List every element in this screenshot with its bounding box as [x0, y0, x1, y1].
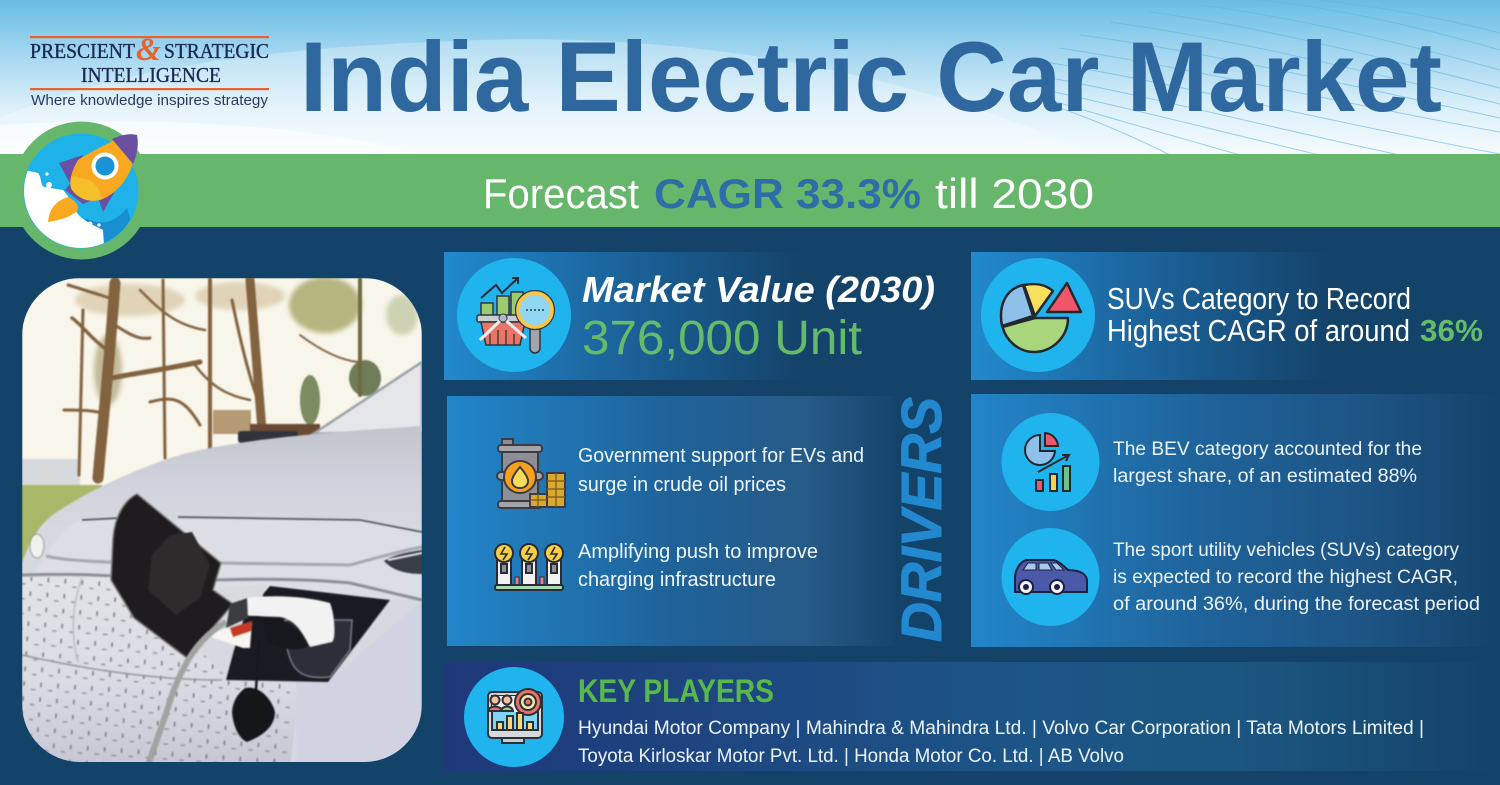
forecast CAGR value: CAGR 33.3%: [654, 170, 921, 217]
key players list line 1: Hyundai Motor Company | Mahindra & Mahindra Ltd. | Volvo Car Corporation | Tata Motors Limited |: [578, 718, 1424, 739]
charging cable: [148, 622, 226, 765]
hood crease and face: [22, 517, 422, 600]
logo: Prescient & Strategic Intelligence: Where knowledge inspires strategy: [31, 92, 268, 109]
charging socket: [226, 586, 390, 682]
forecast band: [0, 154, 1500, 227]
logo: Prescient & Strategic Intelligence: &: [136, 32, 161, 68]
plug cap: [231, 679, 276, 743]
market value figure: 376,000 Unit: [582, 312, 862, 365]
icon: market analysis: [457, 258, 571, 372]
driver text 2 continued: charging infrastructure: [578, 569, 776, 591]
charging port door: [111, 494, 233, 658]
panel: key players: [444, 662, 1500, 771]
driver text 2: Amplifying push to improve: [578, 541, 818, 563]
header sky background: [0, 0, 1500, 155]
photo: electric car charging: [22, 277, 422, 785]
SUVs line 2: Highest CAGR of around: [1107, 313, 1410, 348]
icon: pie chart: [981, 258, 1095, 372]
SUV text line 3: of around 36%, during the forecast period: [1113, 594, 1480, 615]
panel: segment insights: [971, 394, 1500, 647]
windshield: [313, 362, 422, 434]
logo: Prescient & Strategic Intelligence: PRESCIENT: [30, 39, 135, 63]
BEV text line 2: largest share, of an estimated 88%: [1113, 466, 1417, 487]
background sky and trees: [22, 278, 422, 563]
icon: charging stations: [495, 544, 563, 590]
title: India Electric Car Market: [300, 21, 1442, 132]
driver text 1: Government support for EVs and: [578, 445, 864, 467]
charging plug: [208, 596, 334, 649]
drivers vertical heading: DRIVERS: [890, 397, 954, 642]
car body: [22, 426, 422, 785]
icon: rocket badge: [23, 122, 140, 260]
key players heading: KEY PLAYERS: [578, 673, 774, 709]
SUV text line 1: The sport utility vehicles (SUVs) category: [1113, 540, 1459, 561]
icon: analytics monitor: [464, 667, 564, 767]
icon: oil barrel and coins: [497, 439, 565, 508]
market value heading: Market Value (2030): [582, 269, 935, 310]
key players list line 2: Toyota Kirloskar Motor Pvt. Ltd. | Honda Motor Co. Ltd. | AB Volvo: [578, 746, 1124, 767]
dotted grille: [22, 577, 422, 770]
logo: Prescient & Strategic Intelligence: INTELLIGENCE: [81, 63, 221, 87]
icon: pie and bar growth: [1002, 413, 1100, 511]
panel: SUVs highlight: [971, 252, 1500, 380]
forecast end year: till 2030: [935, 170, 1094, 217]
SUVs line 1: SUVs Category to Record: [1107, 281, 1411, 316]
BEV text line 1: The BEV category accounted for the: [1113, 439, 1422, 460]
icon: SUV car: [1002, 528, 1100, 626]
panel: market value: [444, 252, 970, 380]
logo: Prescient & Strategic Intelligence: STRATEGIC: [164, 39, 269, 63]
forecast label: Forecast: [483, 170, 639, 217]
driver text 1 continued: surge in crude oil prices: [578, 474, 786, 496]
SUVs 36 percent: 36%: [1420, 313, 1483, 348]
panel: drivers: [447, 396, 895, 646]
logo: Prescient & Strategic Intelligence: [30, 32, 269, 109]
SUV text line 2: is expected to record the highest CAGR,: [1113, 567, 1458, 588]
